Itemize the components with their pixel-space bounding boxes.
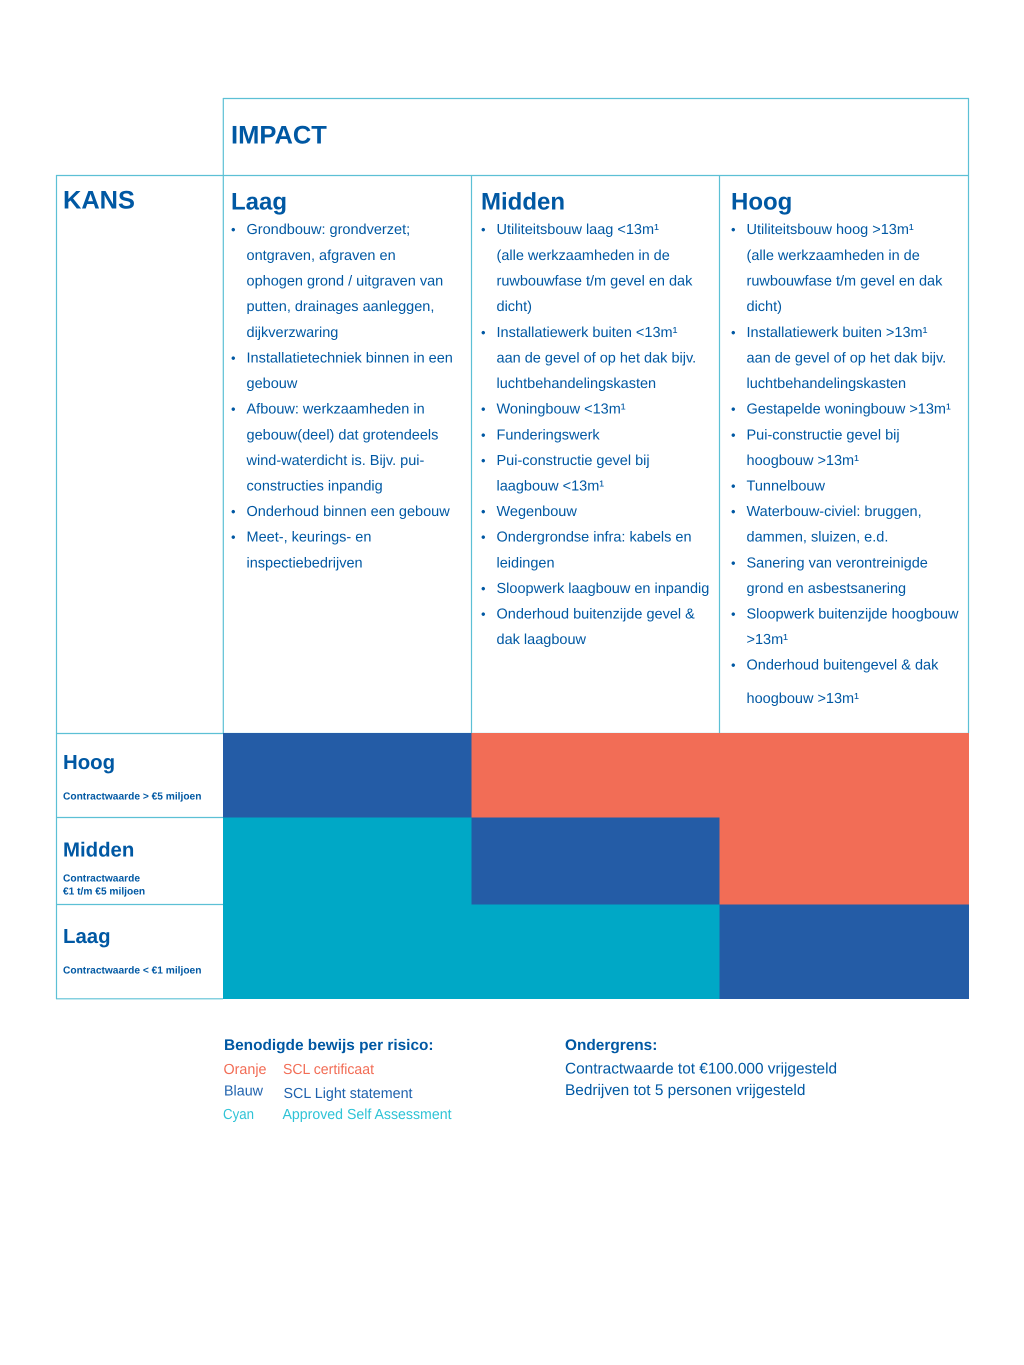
panel: impact hoog: hoogbouw >13m¹ [746,453,859,469]
panel: impact hoog: grond en asbestsanering [746,581,906,597]
legend: benodigde bewijs per risico: SCL Light statement [284,1086,412,1102]
text block: ondergrens: Ondergrens: [565,1037,657,1054]
row label: midden [63,840,145,898]
text block: ondergrens: Bedrijven tot 5 personen vrijgesteld [565,1082,805,1099]
panel: impact laag: putten, drainages aanleggen, [246,299,434,315]
legend: benodigde bewijs per risico: Cyan [223,1107,254,1123]
matrix grid lines [56,98,969,999]
panel: impact laag: • [231,350,236,366]
legend: benodigde bewijs per risico [223,1037,452,1123]
panel: impact hoog: luchtbehandelingskasten [746,376,906,392]
panel: impact midden: • [481,325,486,340]
panel: impact hoog: Sanering van verontreinigde [746,556,928,572]
panel: impact laag: Laag [231,188,287,216]
panel: impact midden: • [481,581,486,596]
legend: benodigde bewijs per risico: Oranje [224,1062,266,1078]
panel: impact midden: Onderhoud buitenzijde gevel & [496,606,695,622]
panel: impact midden: • [481,453,486,468]
panel: impact midden: Pui-constructie gevel bij [496,453,650,469]
panel: impact midden: luchtbehandelingskasten [496,376,656,392]
panel: impact hoog: Onderhoud buitengevel & dak [746,658,939,674]
panel: impact laag: • [231,504,236,519]
panel: impact hoog: dicht) [746,299,782,315]
row label: midden: Midden [63,840,134,862]
panel: impact hoog: Gestapelde woningbouw >13m¹ [746,402,951,418]
panel: impact laag: gebouw [246,376,298,392]
panel: impact laag: • [231,402,236,416]
heading: impact: IMPACT [231,121,327,149]
panel: impact hoog: hoogbouw >13m¹ [746,691,859,707]
panel: impact hoog: • [731,504,736,519]
panel: impact midden: (alle werkzaamheden in de [496,248,670,264]
legend: benodigde bewijs per risico: Blauw [224,1084,263,1100]
panel: impact hoog: • [731,658,736,672]
panel: impact hoog: • [731,556,736,570]
panel: impact hoog: • [731,402,736,416]
panel: impact hoog: Installatiewerk buiten >13m¹ [746,325,928,341]
panel: impact hoog: Sloopwerk buitenzijde hoogbouw [746,606,959,622]
panel: impact hoog: • [731,428,736,442]
row label: hoog [63,752,201,802]
panel: impact midden: • [481,504,486,519]
panel: impact hoog: dammen, sluizen, e.d. [746,530,888,546]
panel: impact midden: Sloopwerk laagbouw en inpandig [496,581,709,597]
legend: benodigde bewijs per risico: Approved Self Assessment [282,1107,452,1123]
panel: impact laag: gebouw(deel) dat grotendeels [246,428,438,444]
panel: impact hoog: Pui-constructie gevel bij [746,428,900,444]
panel: impact midden [481,188,709,648]
panel: impact laag [231,188,453,572]
panel: impact midden: Utiliteitsbouw laag <13m¹ [496,222,659,238]
panel: impact hoog: Tunnelbouw [746,478,825,494]
text block: ondergrens [565,1037,837,1099]
panel: impact midden: Woningbouw <13m¹ [496,402,626,418]
panel: impact midden: Funderingswerk [496,428,600,444]
panel: impact midden: aan de gevel of op het dak bijv. [496,350,696,366]
panel: impact laag: Installatietechniek binnen in een [246,350,453,366]
row label: laag: Contractwaarde < €1 miljoen [63,966,201,976]
panel: impact midden: • [481,530,486,544]
panel: impact hoog: Utiliteitsbouw hoog >13m¹ [746,222,914,238]
panel: impact hoog: • [731,606,736,622]
legend: benodigde bewijs per risico: Benodigde bewijs per risico: [224,1037,434,1054]
panel: impact laag: ontgraven, afgraven en [246,248,396,264]
panel: impact hoog: • [731,478,736,494]
panel: impact midden: dak laagbouw [496,632,587,648]
row label: midden: €1 t/m €5 miljoen [63,886,145,898]
panel: impact midden: • [481,222,486,237]
heading: kans: KANS [63,187,135,215]
panel: impact midden: ruwbouwfase t/m gevel en dak [496,274,693,290]
panel: impact midden: dicht) [496,299,532,315]
panel: impact midden: Wegenbouw [496,504,577,520]
panel: impact hoog: >13m¹ [746,632,788,648]
panel: impact midden: Installatiewerk buiten <13m¹ [496,325,678,341]
panel: impact midden: • [481,428,486,442]
panel: impact midden: Ondergrondse infra: kabels en [496,530,692,546]
row label: hoog: Contractwaarde > €5 miljoen [63,792,201,802]
row label: laag [63,926,201,976]
panel: impact laag: wind-waterdicht is. Bijv. pui- [246,453,424,469]
panel: impact laag: Onderhoud binnen een gebouw [246,504,450,520]
panel: impact laag: Meet-, keurings- en [246,530,371,546]
panel: impact hoog: (alle werkzaamheden in de [746,248,920,264]
panel: impact hoog: ruwbouwfase t/m gevel en dak [746,274,943,290]
panel: impact hoog: Hoog [731,188,792,216]
panel: impact laag: inspectiebedrijven [246,556,363,572]
row label: hoog: Hoog [63,752,115,774]
panel: impact laag: constructies inpandig [246,478,383,494]
legend: benodigde bewijs per risico: SCL certificaat [283,1062,374,1078]
text block: ondergrens: Contractwaarde tot €100.000 vrijgesteld [565,1060,837,1078]
risk matrix cells [223,733,969,999]
panel: impact hoog [731,188,959,707]
panel: impact laag: Grondbouw: grondverzet; [246,222,410,238]
panel: impact midden: Midden [481,188,565,216]
panel: impact midden: leidingen [496,556,555,572]
row label: laag: Laag [63,926,111,948]
panel: impact hoog: Waterbouw-civiel: bruggen, [746,504,922,520]
panel: impact midden: • [481,606,486,622]
panel: impact hoog: • [731,325,736,340]
panel: impact laag: Afbouw: werkzaamheden in [246,402,425,418]
row label: midden: Contractwaarde [63,874,140,884]
panel: impact laag: ophogen grond / uitgraven van [246,274,443,290]
panel: impact hoog: aan de gevel of op het dak bijv. [746,350,946,366]
panel: impact hoog: • [731,222,736,237]
panel: impact laag: • [231,530,236,544]
panel: impact midden: • [481,402,486,416]
panel: impact laag: • [231,222,236,237]
panel: impact midden: laagbouw <13m¹ [496,478,604,494]
panel: impact laag: dijkverzwaring [246,325,338,341]
